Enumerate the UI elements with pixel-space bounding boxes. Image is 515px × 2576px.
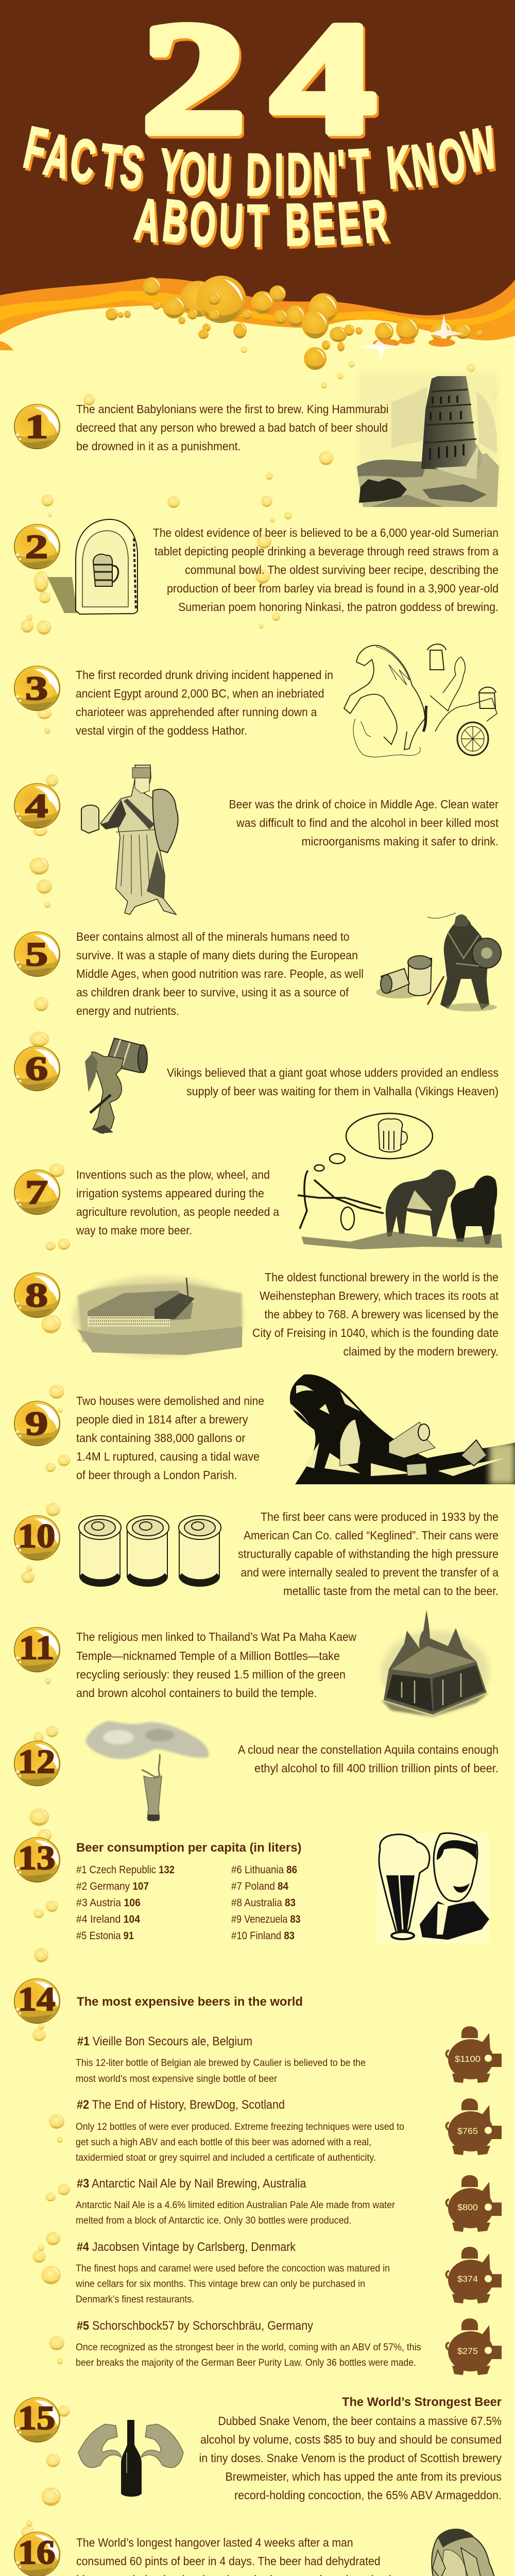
fact 6 [14, 1038, 499, 1133]
badge 11: 11 [19, 1629, 54, 1667]
title: facts you didn't know: D [245, 141, 271, 208]
heading: most expensive beers: The most expensive beers in the world [77, 1995, 303, 2009]
text fact 5 [76, 930, 364, 1018]
foam bubbles [106, 276, 483, 370]
badge 12 [14, 1741, 60, 1786]
badge 16 [14, 2532, 60, 2576]
piggy price 1 [446, 2026, 502, 2083]
badge 15: 15 [18, 2399, 55, 2437]
text fact 2: tablet depicting people drinking a beverage through reed straws from a [154, 545, 499, 558]
text fact 16 [76, 2536, 397, 2576]
illustration: warrior with kegs [376, 913, 501, 1011]
badge 11 [14, 1627, 60, 1672]
text fact 10: The first beer cans were produced in 1933 by the [261, 1510, 499, 1523]
text fact 9 [76, 1394, 264, 1482]
text fact 3 [76, 668, 333, 737]
text fact 4: was difficult to find and the alcohol in beer killed most [236, 816, 499, 829]
text fact 9: 1.4M L ruptured, causing a tidal wave [76, 1450, 260, 1463]
illustration: farmer thinking of beer [298, 1113, 502, 1249]
text fact 2: production of beer from barley via bread is found in a 3,900 year-old [167, 582, 499, 595]
ranking table: #2 Germany 107 [76, 1880, 149, 1892]
illustration: three beer cans [79, 1516, 221, 1586]
title: about beer: R [359, 187, 390, 256]
beer 2: #2 The End of History, BrewDog, Scotland [77, 2098, 285, 2112]
ranking table [76, 1864, 301, 1942]
title: facts you didn't know: Y [158, 136, 184, 204]
badge 8: 8 [25, 1276, 48, 1314]
text fact 4: microorganisms making it safer to drink. [302, 835, 499, 848]
beer 4: Denmark’s finest restaurants. [76, 2294, 194, 2305]
text fact 11 [76, 1630, 356, 1700]
text fact 11: and brown alcohol containers to build the temple. [76, 1686, 317, 1700]
piggy price 4 [446, 2247, 502, 2303]
piggy price 1: $1100 [455, 2054, 480, 2064]
text fact 15 [199, 2395, 502, 2502]
text fact 15: record-holding concoction, the 65% ABV Armageddon. [234, 2488, 502, 2502]
ranking table: #7 Poland 84 [231, 1880, 288, 1892]
badge 16: 16 [18, 2534, 55, 2571]
illustration: retro man with beer [377, 1833, 489, 1943]
text fact 2: communal bowl. The oldest surviving beer recipe, describing the [185, 563, 499, 577]
piggy price 5 [446, 2318, 502, 2375]
badge 3 [14, 666, 60, 711]
text fact 1: decreed that any person who brewed a bad batch of beer should [76, 421, 388, 434]
text fact 11: The religious men linked to Thailand’s Wat Pa Maha Kaew [76, 1630, 356, 1643]
text fact 3: ancient Egypt around 2,000 BC, when an inebriated [76, 687, 324, 700]
text fact 15: in tiny doses. Snake Venom is the product of Scottish brewery [199, 2451, 502, 2465]
badge 6 [14, 1046, 60, 1091]
text fact 8: Weihenstephan Brewery, which traces its roots at [260, 1289, 499, 1302]
text fact 15: Brewmeister, which has upped the ante from its previous [226, 2470, 502, 2483]
piggy price 2 [446, 2098, 502, 2155]
title: about beer: E [311, 190, 336, 258]
fact 13 [14, 1833, 489, 1943]
ranking table: #6 Lithuania 86 [231, 1864, 297, 1876]
title: about beer: U [218, 191, 245, 258]
badge 4: 4 [25, 787, 48, 824]
title: facts you didn't know: A [40, 121, 76, 191]
text fact 11: recycling seriously: they reused 1.5 million of the green [76, 1668, 346, 1681]
text fact 5: energy and nutrients. [76, 1004, 179, 1018]
fact 9 [14, 1375, 515, 1485]
beer 3: #3 Antarctic Nail Ale by Nail Brewing, Australia [77, 2177, 306, 2191]
ranking table: #10 Finland 83 [231, 1930, 295, 1942]
text fact 10 [238, 1510, 499, 1598]
text fact 8: City of Freising in 1040, which is the founding date [252, 1326, 499, 1340]
badge 13 [14, 1837, 60, 1883]
beer 4: The finest hops and caramel were used before the concoction was matured in [76, 2263, 390, 2274]
text fact 9: Two houses were demolished and nine [76, 1394, 264, 1408]
illustration: hungover man [415, 2529, 503, 2576]
title: facts you didn't know: C [66, 125, 100, 195]
fact 10 [14, 1510, 499, 1598]
illustration: temple of a million bottles [381, 1610, 489, 1717]
badge 7 [14, 1170, 60, 1215]
fact 7 [14, 1113, 502, 1249]
title: about beer: T [247, 192, 268, 259]
ranking table: #4 Ireland 104 [76, 1913, 140, 1925]
text fact 8: The oldest functional brewery in the world is the [265, 1270, 499, 1284]
piggy price 2: $765 [457, 2126, 478, 2136]
beer 5 [76, 2319, 421, 2368]
badge 1 [14, 404, 60, 449]
text fact 7: agriculture revolution, as people needed a [76, 1205, 279, 1218]
beer 2: taxidermied stoat or grey squirrel and included a certificate of authenticity. [76, 2153, 376, 2163]
beer 2: get such a high ABV and each bottle of this beer was adorned with a real, [76, 2137, 371, 2148]
text fact 7 [76, 1168, 279, 1237]
text fact 10: metallic taste from the metal can to the beer. [283, 1584, 499, 1598]
title: about beer: O [188, 189, 218, 257]
text fact 6: supply of beer was waiting for them in Valhalla (Vikings Heaven) [186, 1084, 499, 1098]
text fact 9: tank containing 388,000 gallons or [76, 1431, 246, 1445]
illustration: medieval man with mug [81, 765, 178, 914]
title: facts you didn't know: K [384, 132, 414, 201]
text fact 7: Inventions such as the plow, wheel, and [76, 1168, 270, 1181]
badge 2 [14, 524, 60, 569]
badge 1: 1 [25, 408, 48, 445]
piggy price 3 [446, 2175, 502, 2232]
fact 4 [14, 765, 499, 914]
badge 13: 13 [18, 1839, 55, 1877]
fact 11 [14, 1610, 489, 1717]
text fact 5: Middle Ages, when good nutrition was rare. People, as well [76, 967, 364, 980]
text fact 8: the abbey to 768. A brewery was licensed by the [265, 1308, 499, 1321]
text fact 3: The first recorded drunk driving incident happened in [76, 668, 333, 682]
title: facts you didn't know: O [178, 140, 208, 208]
title: facts you didn't know: S [117, 132, 146, 201]
text fact 1: The ancient Babylonians were the first to brew. King Hammurabi [76, 402, 388, 416]
text fact 2: Sumerian poem honoring Ninkasi, the patron goddess of brewing. [178, 600, 499, 614]
illustration: cloud above beer glass [85, 1721, 209, 1821]
title: about beer: B [160, 187, 191, 256]
beer 4: wine cellars for six months. This vintage brew can only be purchased in [75, 2279, 365, 2290]
badge 14: 14 [18, 1980, 55, 2018]
fact 2 [14, 519, 499, 614]
title: facts you didn't know: ' [336, 138, 347, 205]
beer 5: #5 Schorschbock57 by Schorschbräu, Germany [77, 2319, 313, 2333]
text fact 12: ethyl alcohol to fill 400 trillion trillion pints of beer. [254, 1761, 499, 1775]
beer 1: #1 Vieille Bon Secours ale, Belgium [77, 2035, 252, 2048]
title: facts you didn't know: W [457, 113, 502, 185]
fact 14 [14, 1978, 502, 2375]
beer 1: most world’s most expensive single bottle of beer [76, 2074, 278, 2084]
fact 3 [14, 644, 497, 757]
badge 4 [14, 783, 60, 828]
text fact 9: of beer through a London Parish. [76, 1468, 237, 1482]
title: facts you didn't know [19, 113, 502, 208]
title: facts you didn't know: D [287, 141, 311, 208]
text fact 11: Temple—nicknamed Temple of a Million Bottles—take [76, 1649, 340, 1663]
title: about beer: A [131, 185, 164, 255]
illustration: Weihenstephan brewery [73, 1276, 243, 1357]
illustration: beer tidal wave [290, 1375, 515, 1485]
badge 12: 12 [18, 1743, 55, 1781]
title: about beer: E [336, 189, 363, 257]
text fact 15: The World’s Strongest Beer [342, 2395, 502, 2409]
beer 2 [76, 2098, 404, 2163]
text fact 12: A cloud near the constellation Aquila contains enough [238, 1743, 499, 1756]
beer 4: #4 Jacobsen Vintage by Carlsberg, Denmark [77, 2240, 296, 2254]
text fact 4 [229, 798, 499, 848]
piggy price 5: $275 [457, 2346, 478, 2356]
text fact 5: Beer contains almost all of the minerals humans need to [76, 930, 350, 943]
title: facts you didn't know: O [434, 125, 470, 195]
badge 10: 10 [18, 1517, 55, 1555]
beer 3: melted from a block of Antarctic ice. Only 30 bottles were produced. [76, 2215, 351, 2226]
fact 12 [14, 1721, 499, 1821]
beer 1 [76, 2035, 366, 2084]
ranking table: #8 Australia 83 [231, 1897, 296, 1909]
ranking table: #1 Czech Republic 132 [76, 1864, 175, 1876]
illustration: horse and chariot [344, 644, 497, 757]
piggy price 3: $800 [457, 2202, 478, 2212]
beer 5: beer breaks the majority of the German Beer Purity Law. Only 36 bottles were made. [76, 2358, 416, 2368]
badge 9: 9 [25, 1404, 48, 1442]
title: facts you didn't know: U [205, 141, 232, 208]
badge 3: 3 [25, 669, 48, 707]
text fact 5: as children drank beer to survive, using it as a source of [76, 986, 349, 999]
text fact 7: irrigation systems appeared during the [76, 1187, 264, 1200]
beer 5: Once recognized as the strongest beer in the world, coming with an ABV of 57%, this [76, 2342, 421, 2353]
heading: beer consumption: Beer consumption per capita (in liters) [76, 1841, 302, 1855]
fact 16 [14, 2529, 503, 2576]
badge 15 [14, 2397, 60, 2443]
text fact 7: way to make more beer. [76, 1224, 192, 1237]
badge 8 [14, 1273, 60, 1318]
illustration: viking with barrel [85, 1038, 147, 1133]
badge 10 [14, 1515, 60, 1561]
text fact 8 [252, 1270, 499, 1358]
badge 6: 6 [25, 1049, 48, 1087]
beer 1: This 12-liter bottle of Belgian ale brewed by Caulier is believed to be the [76, 2058, 366, 2069]
badge 5 [14, 931, 60, 977]
ranking table: #5 Estonia 91 [76, 1930, 134, 1942]
badge 14 [14, 1978, 60, 2024]
badge 9 [14, 1401, 60, 1446]
badge 5: 5 [25, 935, 48, 973]
fact 1 [14, 372, 499, 507]
beer 3: Antarctic Nail Ale is a 4.6% limited edition Australian Pale Ale made from water [76, 2200, 396, 2211]
title: facts you didn't know: N [312, 140, 337, 207]
text fact 3: vestal virgin of the goddess Hathor. [76, 724, 247, 737]
ranking table: #9 Venezuela 83 [231, 1913, 301, 1925]
badge 2: 2 [25, 528, 48, 565]
beer 4 [75, 2240, 390, 2305]
text fact 5: survive. It was a staple of many diets during the European [76, 948, 358, 962]
text fact 15: alcohol by volume, costs $85 to buy and should be consumed [200, 2433, 502, 2446]
fact 15 [14, 2395, 502, 2502]
title: about beer: B [284, 191, 310, 258]
text fact 9: people died in 1814 after a brewery [76, 1413, 248, 1426]
text fact 1: be drowned in it as a punishment. [76, 439, 241, 453]
text fact 10: and were internally sealed to prevent the transfer of a [241, 1566, 499, 1579]
title: facts you didn't know: N [408, 130, 440, 199]
text fact 10: structurally capable of withstanding the high pressure [238, 1547, 499, 1561]
text fact 4: Beer was the drink of choice in Middle Age. Clean water [229, 798, 499, 811]
title: facts you didn't know: I [274, 141, 284, 208]
text fact 12 [238, 1743, 499, 1775]
text fact 16: consumed 60 pints of beer in 4 days. The beer had dehydrated [76, 2554, 381, 2568]
beer 3 [76, 2177, 396, 2226]
title: facts you didn't know: T [96, 131, 125, 200]
title: about beer [131, 185, 390, 259]
text fact 16: The World’s longest hangover lasted 4 weeks after a man [76, 2536, 353, 2549]
text fact 2 [153, 526, 499, 614]
illustration: tower of Babel [356, 372, 499, 507]
title: facts you didn't know: F [19, 113, 53, 183]
text fact 8: claimed by the modern brewery. [343, 1345, 499, 1358]
beer 2: Only 12 bottles of were ever produced. Extreme freezing techniques were used to [76, 2122, 404, 2132]
illustration: stone tablet with mug [47, 519, 138, 614]
text fact 10: American Can Co. called “Keglined”. Their cans were [244, 1529, 499, 1542]
text fact 3: charioteer was apprehended after running down a [76, 705, 317, 719]
text fact 1 [76, 402, 388, 453]
fact 5 [14, 913, 501, 1018]
header background [0, 0, 515, 361]
piggy price 4: $374 [457, 2274, 478, 2284]
fact 8 [14, 1270, 499, 1358]
title numeral 24 [142, 0, 375, 166]
illustration: bottle with flexing arms [78, 2420, 183, 2497]
ranking table: #3 Austria 106 [76, 1897, 141, 1909]
text fact 6 [167, 1066, 499, 1098]
badge 7: 7 [25, 1173, 48, 1211]
title: facts you didn't know: T [348, 136, 371, 204]
